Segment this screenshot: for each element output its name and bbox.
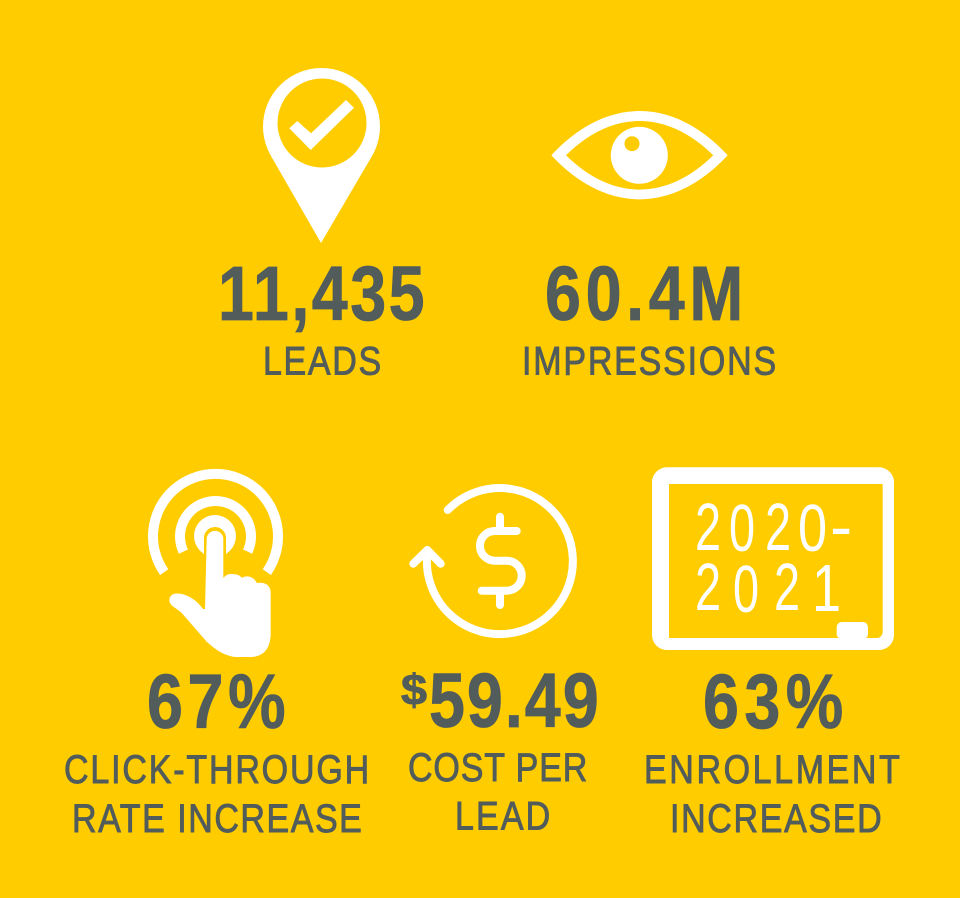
leads label: LEADS [263,338,381,383]
icon: chalkboard reading 2020-2021: - [830,489,852,564]
icon: eye [551,111,728,199]
cost label [408,744,587,838]
icon: chalkboard reading 2020-2021 [652,467,894,650]
panel: impressions [522,111,776,383]
panel: click-through rate [64,474,369,841]
icon: chalkboard reading 2020-2021: 0 [729,492,755,566]
icon: chalkboard reading 2020-2021: 2 [774,551,800,625]
cost label: COST PER [408,744,587,790]
click-through label [64,746,369,841]
impressions label: IMPRESSIONS [522,338,776,383]
cost number: $ [401,666,427,715]
icon: chalkboard reading 2020-2021: 2 [695,491,721,565]
enrollment label [644,746,900,841]
leads number: 11,435 [218,252,425,337]
enrollment label: ENROLLMENT [644,746,900,792]
click-through label: RATE INCREASE [72,795,362,841]
enrollment label: INCREASED [670,795,882,841]
icon: map pin with check mark [263,68,380,243]
icon: chalkboard reading 2020-2021: 2 [695,551,721,625]
icon: chalkboard reading 2020-2021: 2 [765,491,791,565]
impressions number: 60.4M [545,252,743,337]
panel: enrollment [644,467,900,841]
panel: leads [218,68,425,383]
click-through number: 67% [147,660,286,745]
click-through label: CLICK-THROUGH [64,746,369,792]
cost label: LEAD [455,793,550,838]
icon: chalkboard reading 2020-2021: 0 [733,553,759,627]
icon: chalkboard reading 2020-2021: 0 [798,491,827,565]
enrollment number: 63% [703,660,843,745]
panel: cost per lead [401,488,599,838]
cost number: 59.49 [429,659,599,744]
icon: circular arrow with dollar sign [413,488,573,634]
icon: finger tapping with signal rings [153,474,278,657]
icon: chalkboard reading 2020-2021: 1 [812,551,841,625]
